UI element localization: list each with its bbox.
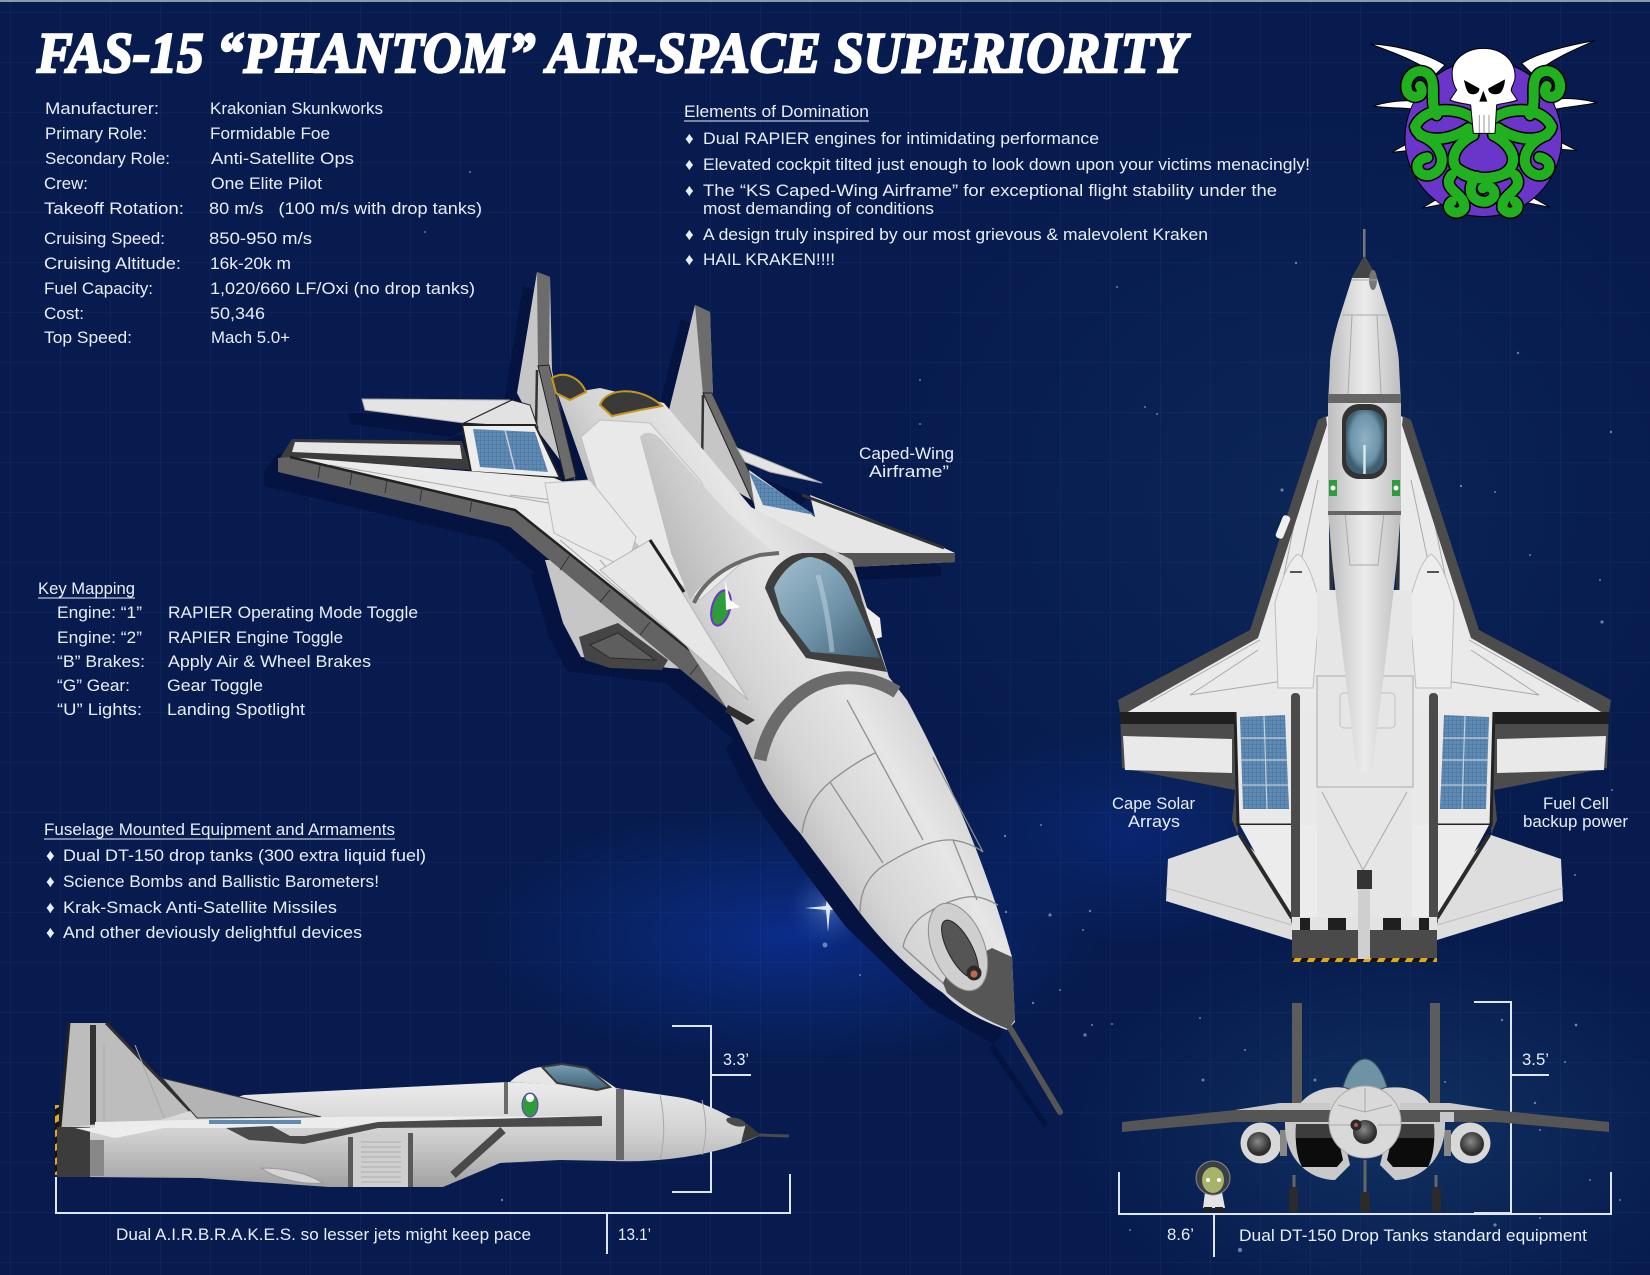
specifications table: 50,346 [210,304,265,323]
dimension lines: side view [56,1026,790,1254]
specifications table: Primary Role: [45,124,147,143]
left main wing [278,457,756,725]
solar array frame [1235,712,1317,830]
text block: key mapping: Engine: “2” [57,628,142,647]
fuselage bands [504,1082,624,1160]
text block: fuselage mounted equipment: Fuselage Mounted Equipment and Armaments [44,820,395,839]
dimension labels: front view: 3.5’ [1522,1050,1549,1069]
dimension labels: front view: 8.6’ [1167,1225,1194,1244]
wing aft section [1120,712,1238,835]
specifications table: 1,020/660 LF/Oxi (no drop tanks) [210,279,475,298]
dimension lines: front view [1119,1002,1611,1257]
text block: fuselage mounted equipment: Dual DT-150 drop tanks (300 extra liquid fuel) [63,846,426,865]
kerbal figure [1196,1161,1230,1213]
text block: fuselage mounted equipment: ♦ [46,846,55,865]
text block: key mapping: Engine: “1” [57,603,142,622]
tail beam and hazard stripe [1292,870,1437,962]
aircraft: front view [1122,1003,1609,1213]
engine nozzles [552,375,662,416]
probe [1363,229,1366,257]
fin seen from above [1291,693,1300,925]
dorsal hump and spine panels [581,420,775,600]
left solar array [462,425,560,478]
forward fuselage band [760,678,897,760]
pitot probe [1010,1028,1060,1112]
text block: fuselage mounted equipment: And other deviously delightful devices [63,923,362,942]
specifications table: Secondary Role: [45,149,170,168]
belly pod [261,1168,323,1183]
annotation: caped-wing airframe [859,444,954,481]
specifications table: Mach 5.0+ [211,328,290,347]
text block: key mapping: Landing Spotlight [167,700,305,719]
text block: elements of domination: ♦ [685,155,694,174]
text block: elements of domination: HAIL KRAKEN!!!! [703,250,835,269]
text block: key mapping: “U” Lights: [57,700,142,719]
decal emblem [708,580,740,628]
wing root strake [600,540,748,700]
aircraft: side view [55,1023,789,1187]
dimension labels: side view [116,1050,749,1244]
right wing [749,470,955,567]
canopy [1342,404,1387,479]
specifications table: One Elite Pilot [211,174,322,193]
annotation: cape solar arrays: Arrays [1128,812,1180,831]
airbrake louvers [348,1133,413,1187]
left half of airframe [1118,416,1333,940]
specifications table: Cost: [44,304,84,323]
fuselage band [694,553,779,603]
text block: elements of domination: Elevated cockpit tilted just enough to look down upon your victims menacingly! [703,155,1310,174]
text block: elements of domination [684,102,1310,269]
fuselage [1328,256,1401,772]
specifications table: Manufacturer: [45,99,159,118]
canopy [510,1064,616,1092]
engine pod [1275,554,1320,688]
specifications table: Anti-Satellite Ops [211,149,354,168]
ventral intake [545,560,700,670]
text block: elements of domination: ♦ [685,181,694,200]
text block: elements of domination: Dual RAPIER engines for intimidating performance [703,129,1099,148]
annotation: fuel cell backup power: Fuel Cell [1543,794,1609,813]
text block: fuselage mounted equipment: ♦ [46,872,55,891]
fuselage and nose [558,388,1015,1030]
hazard striped tail strip [55,1105,59,1175]
annotation: caped-wing airframe: Airframe” [869,462,949,481]
dimension labels: side view: Dual A.I.R.B.R.A.K.E.S. so lesser jets might keep pace [116,1225,531,1244]
intakes [1285,1122,1445,1180]
specifications table: 16k-20k m [210,254,291,273]
nose panel lines [660,1094,706,1160]
text block: key mapping: Key Mapping [38,579,135,598]
text block: fuselage mounted equipment: ♦ [46,898,55,917]
specifications table: Fuel Capacity: [44,279,153,298]
centre body [1317,590,1412,918]
canopy [1343,1059,1387,1095]
solar array [1240,715,1289,809]
text block: key mapping: Gear Toggle [167,676,263,695]
main fin [60,1023,197,1127]
fuselage front circle [1329,1086,1401,1158]
aircraft: top view [1118,229,1611,962]
text block: key mapping: Apply Air & Wheel Brakes [168,652,371,671]
wing surface [1120,416,1330,712]
engine pod fairing [545,480,636,568]
dimension labels: front view: Dual DT-150 Drop Tanks standard equipment [1239,1226,1587,1245]
fuselage [59,1082,761,1187]
annotation: fuel cell backup power: backup power [1523,812,1628,831]
text block: elements of domination: ♦ [685,250,694,269]
star flare [788,868,868,948]
specifications table: Cruising Speed: [44,229,165,248]
aircraft shadow [264,286,1048,1128]
nose cone [943,948,1015,1029]
wing leading edge strip [226,1116,602,1144]
specifications table: Takeoff Rotation: [44,199,184,218]
annotation: cape solar arrays: Cape Solar [1112,794,1195,813]
title: FAS-15 “PHANTOM” AIR-SPACE SUPERIORITY [36,22,1191,85]
canopy [765,553,887,672]
rear wing root [1240,825,1317,920]
specifications table: Cruising Altitude: [44,254,181,273]
icon: skull [1450,48,1517,133]
text block: elements of domination: A design truly inspired by our most grievous & malevolent Kraken [703,225,1208,244]
text block: key mapping: RAPIER Operating Mode Toggle [168,603,418,622]
text block: key mapping [38,579,418,719]
text block: elements of domination: ♦ [685,129,694,148]
fuselage side gap [1330,530,1333,600]
wing light [1275,514,1291,540]
right vertical fin [669,305,765,507]
rear stabilizers [362,399,822,483]
specifications table: Krakonian Skunkworks [210,99,383,118]
specifications table: Crew: [44,174,88,193]
specifications table: Top Speed: [44,328,132,347]
specifications table: 80 m/s (100 m/s with drop tanks) [209,199,482,218]
fuselage bands [1328,394,1401,515]
right solar array [749,472,815,515]
aircraft: isometric three-quarter view [264,272,1060,1128]
rear stabilizer [1166,835,1292,940]
text block: elements of domination: ♦ [685,225,694,244]
text block: fuselage mounted equipment: Science Bombs and Ballistic Barometers! [63,872,379,891]
text block: elements of domination: The “KS Caped-Wing Airframe” for exceptional flight stability under the [703,181,1277,200]
landing gear [1289,1160,1441,1213]
rear tail section [57,1127,104,1177]
right half of airframe [1396,416,1611,940]
nose sensor pod [917,895,999,999]
probe [759,1135,789,1136]
specifications table: 850-950 m/s [209,229,312,248]
text block: key mapping: RAPIER Engine Toggle [168,628,343,647]
dimension labels: side view: 13.1’ [618,1225,651,1244]
wings [1122,1103,1609,1132]
text block: key mapping: “G” Gear: [57,676,130,695]
drop tanks [1240,1122,1490,1164]
text block: elements of domination: Elements of Domination [684,102,869,121]
dimension labels: side view: 3.3’ [723,1050,749,1069]
nose cap and sensor [725,1116,761,1143]
icon: kraken tentacles [1406,71,1560,213]
annotation: cape solar arrays [1112,794,1195,831]
landing gear strut [453,1130,503,1175]
upper fuselage shoulders [1295,1087,1435,1112]
text block: fuselage mounted equipment: ♦ [46,923,55,942]
logo: skull and kraken emblem [1371,41,1597,217]
text block: elements of domination: most demanding of conditions [703,199,934,218]
decal emblems [1329,480,1400,496]
side emblem [522,1093,538,1117]
left vertical fin [517,272,576,480]
annotation: fuel cell backup power [1523,794,1628,831]
specifications table [44,99,482,347]
text block: fuselage mounted equipment: Krak-Smack Anti-Satellite Missiles [63,898,337,917]
upper wing surface [75,1116,602,1138]
left wing flap [280,439,471,470]
text block: fuselage mounted equipment [44,820,426,942]
annotation: caped-wing airframe: Caped-Wing [859,444,954,463]
specifications table: Formidable Foe [210,124,330,143]
dimension labels: front view [1167,1050,1587,1245]
text block: key mapping: “B” Brakes: [57,652,145,671]
vertical fins [1292,1003,1440,1103]
secondary fin [162,1078,321,1118]
